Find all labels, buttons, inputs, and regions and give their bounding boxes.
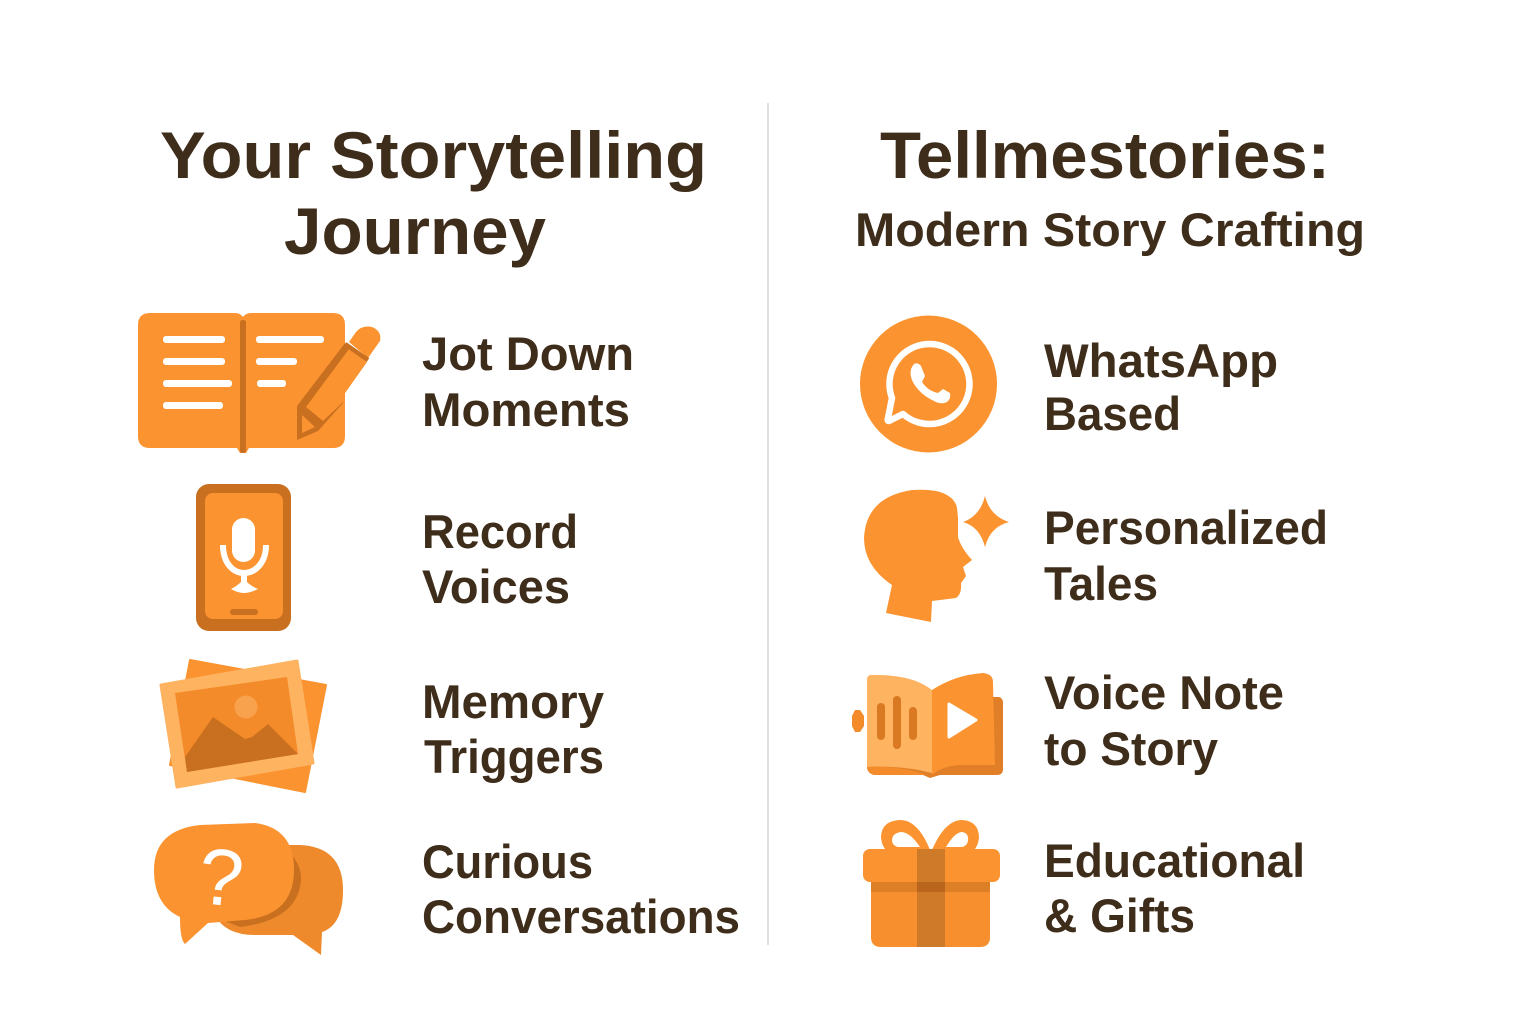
heading: Your Storytelling Journey <box>160 118 707 268</box>
label: Educational & Gifts: & Gifts <box>1044 889 1195 942</box>
label: Voice Note to Story: to Story <box>1044 722 1218 775</box>
label: Memory Triggers: Triggers <box>424 730 604 783</box>
label: Memory Triggers <box>422 675 604 783</box>
label: Voice Note to Story: Voice Note <box>1044 666 1284 719</box>
label: Curious Conversations: Conversations <box>422 890 740 943</box>
icon: gift box <box>863 820 1000 947</box>
icon: speech bubbles with question mark <box>154 823 343 955</box>
panel: Tellmestories features list <box>852 316 1328 947</box>
heading: Tellmestories Modern Story Crafting: Modern Story Crafting <box>855 203 1365 256</box>
label: Educational & Gifts: Educational <box>1044 834 1305 887</box>
label: WhatsApp Based: WhatsApp <box>1044 334 1278 387</box>
icon: voice note book <box>852 673 1003 778</box>
icon: phone with microphone <box>196 484 291 631</box>
heading: Tellmestories Modern Story Crafting: Tellmestories: <box>880 118 1330 192</box>
label: WhatsApp Based: Based <box>1044 387 1181 440</box>
heading: Tellmestories Modern Story Crafting <box>855 118 1365 256</box>
heading: Your Storytelling Journey: Your Storytelling <box>160 118 707 192</box>
panel: storytelling journey list <box>138 313 740 955</box>
label: Record Voices: Record <box>422 505 578 558</box>
label: Voice Note to Story <box>1044 666 1284 775</box>
label: Jot Down Moments: Jot Down <box>422 327 634 380</box>
label: WhatsApp Based <box>1044 334 1278 440</box>
label: Personalized Tales: Tales <box>1044 557 1158 610</box>
label: Personalized Tales <box>1044 501 1328 610</box>
label: Personalized Tales: Personalized <box>1044 501 1328 554</box>
icon: notebook and pencil <box>138 313 380 453</box>
label: Record Voices <box>422 505 578 613</box>
icon: speech bubbles with question mark: ? <box>194 831 248 924</box>
label: Educational & Gifts <box>1044 834 1305 942</box>
heading: Your Storytelling Journey: Journey <box>284 194 546 268</box>
label: Memory Triggers: Memory <box>422 675 604 728</box>
label: Curious Conversations: Curious <box>422 835 593 888</box>
label: Record Voices: Voices <box>422 560 570 613</box>
icon: stacked photos <box>161 660 326 792</box>
label: Curious Conversations <box>422 835 740 943</box>
label: Jot Down Moments: Moments <box>422 383 630 436</box>
icon: WhatsApp <box>860 316 997 452</box>
label: Jot Down Moments <box>422 327 634 436</box>
icon: head with sparkle <box>864 490 1009 622</box>
